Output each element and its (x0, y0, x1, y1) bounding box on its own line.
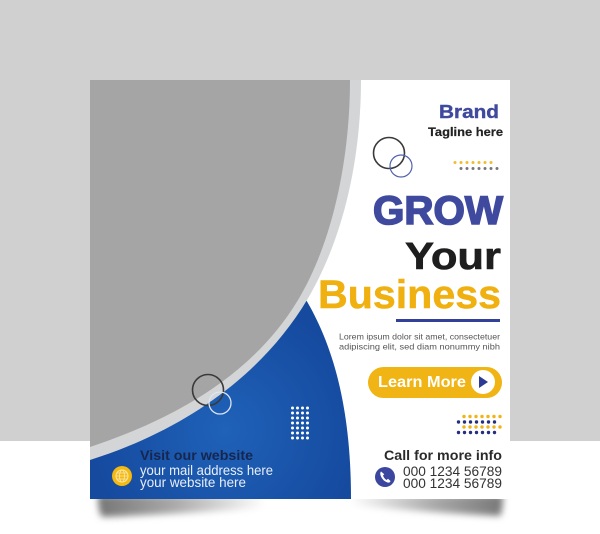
button: learn more: Learn More (378, 374, 466, 391)
body text (339, 332, 500, 352)
divider rule (396, 319, 500, 322)
headline: business: Business (318, 273, 501, 317)
panel: photo placeholder (90, 80, 350, 447)
icon: white dot grid (291, 406, 309, 440)
text: phone numbers: 000 1234 56789 (403, 475, 502, 491)
body text: Lorem ipsum dolor sit amet, consectetuer (339, 332, 500, 342)
icon: photo rings (192, 374, 231, 414)
dots: top decoration (454, 161, 498, 170)
heading: call for more info: Call for more info (384, 447, 502, 463)
icon: phone (375, 467, 395, 487)
heading: visit our website: Visit our website (140, 447, 253, 463)
text: phone numbers (403, 463, 502, 491)
headline: grow: GROW (373, 189, 503, 233)
body text: adipiscing elit, sed diam nonummy nibh (339, 342, 500, 352)
text: mail address: your mail address here (140, 463, 273, 478)
text: website: your website here (140, 475, 246, 490)
brand name: Brand (439, 101, 499, 122)
headline: your: Your (405, 236, 501, 278)
dots: bottom decoration (457, 415, 502, 434)
panel: blue footer (90, 298, 351, 499)
tagline: Tagline here (428, 125, 503, 139)
card (90, 80, 510, 499)
text: phone numbers: 000 1234 56789 (403, 463, 502, 479)
panel: light band (90, 80, 361, 460)
icon: top rings (374, 138, 412, 177)
button: learn more (368, 367, 502, 398)
icon: globe (112, 466, 132, 486)
card shadow (98, 495, 503, 517)
